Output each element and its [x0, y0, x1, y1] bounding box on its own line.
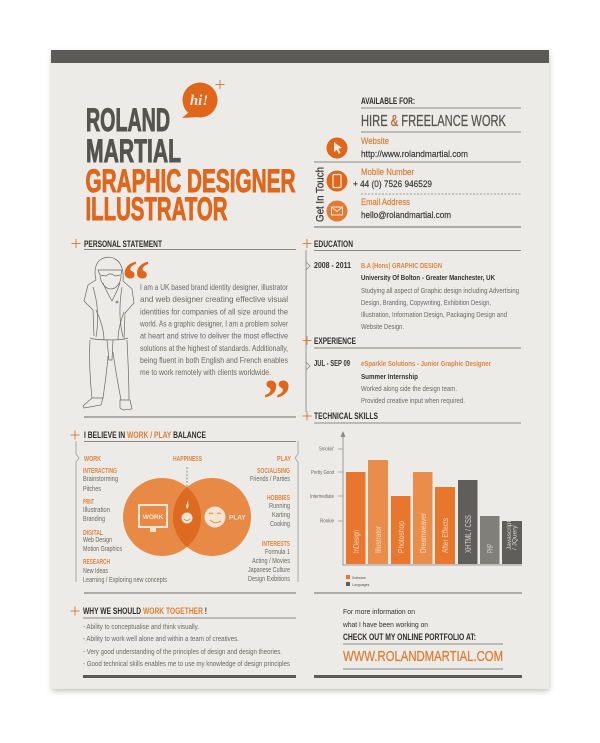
play list: PLAY	[277, 456, 291, 463]
work list	[83, 456, 167, 584]
heading: I BELIEVE IN WORK / PLAY BALANCE	[84, 430, 206, 440]
play list: Karting	[272, 510, 290, 519]
bar chart: Pretty Good	[311, 470, 334, 476]
panel: portfolio call to action: what I have been working on	[342, 620, 428, 629]
panel: availability	[361, 96, 521, 132]
icon: hi speech bubble	[182, 80, 224, 118]
title block	[86, 102, 296, 227]
play list: Formula 1	[265, 547, 290, 556]
bar chart: / JQuery	[512, 525, 518, 550]
statement text: I am a UK based brand identity designer, illustrator	[140, 282, 288, 292]
statement text: and web designer creating effective visual	[140, 294, 288, 304]
play list: INTERESTS	[262, 541, 290, 548]
icon: happy face small	[182, 500, 192, 524]
education entry: Illustration, Information Design, Packaging Design and	[361, 310, 507, 319]
panel: get in touch: http://www.rolandmartial.com	[361, 149, 468, 159]
education entry: Design, Branding, Copywriting, Exhibition Design,	[361, 298, 491, 307]
experience entry	[314, 359, 491, 405]
statement text	[139, 282, 288, 377]
bar chart: InDesign	[352, 530, 361, 553]
panel: get in touch: Mobile Number	[361, 167, 414, 177]
name heading: MARTIAL	[86, 133, 181, 169]
name heading: ROLAND	[86, 102, 170, 138]
chart legend: Software	[352, 576, 366, 580]
play list: Friends / Parties	[250, 474, 290, 483]
closing quotes: ”	[263, 369, 291, 431]
education heading	[302, 239, 521, 250]
bar chart: Illustrator	[374, 526, 383, 553]
name heading	[86, 102, 181, 169]
statement text: solutions at the highest of standards. Additionally,	[140, 343, 288, 353]
chart legend: Languages	[352, 583, 370, 587]
play list: Design Exibitions	[248, 574, 290, 583]
work list: Web Design	[83, 535, 112, 544]
play list: Acting / Movies	[252, 556, 290, 565]
happiness label: HAPPINESS	[173, 456, 202, 463]
bar chart: Smokin'	[319, 446, 334, 452]
experience entry: Summer Internship	[361, 372, 418, 381]
panel: personal statement	[72, 239, 296, 431]
work list: RESEARCH	[83, 559, 110, 566]
panel: work play balance	[70, 430, 298, 593]
icon: monitor: WORK	[143, 514, 164, 521]
work list: Brainstorming	[83, 474, 118, 483]
bullet list: - Good technical skills enables me to use my knowledge of design principles	[83, 659, 290, 668]
bar chart: Rookie	[320, 518, 334, 524]
bar chart: XHTML / CSS	[464, 515, 473, 553]
bar chart	[310, 431, 522, 565]
work list: Learning / Exploring new concepts	[83, 575, 167, 584]
bullet list: - Ability to work well alone and within a team of creatives.	[83, 634, 239, 643]
statement text: being fluent in both English and French enables	[140, 355, 288, 365]
icon: play face: PLAY	[229, 514, 246, 522]
bar chart: Photoshop	[397, 521, 406, 553]
job title heading: GRAPHIC DESIGNER	[86, 163, 296, 199]
panel: portfolio call to action: CHECK OUT MY ONLINE PORTFOLIO AT:	[343, 632, 476, 642]
panel: portfolio call to action: WWW.ROLANDMARTIAL.COM	[343, 648, 503, 665]
illustration: man in hoodie	[83, 257, 134, 410]
paper sheet	[51, 50, 549, 689]
statement text: me to work remotely with clients worldwide.	[140, 367, 271, 377]
icon: website cursor	[326, 138, 348, 158]
education entry: Studying all aspect of Graphic design including Advertising	[361, 286, 519, 295]
bar chart: Javascript	[506, 521, 513, 550]
opening quotes: “	[122, 250, 150, 312]
top bar	[51, 50, 549, 63]
icon: mobile phone	[326, 170, 348, 192]
heading: PERSONAL STATEMENT	[84, 239, 162, 249]
education entry: Website Design.	[361, 322, 404, 331]
heading: TECHNICAL SKILLS	[314, 411, 378, 421]
bar chart: PHP	[486, 544, 495, 553]
work list: PRINT	[83, 499, 94, 506]
panel: get in touch: hello@rolandmartial.com	[361, 210, 451, 220]
education heading: EDUCATION	[314, 239, 353, 249]
icon: hi speech bubble: hi!	[190, 93, 208, 109]
play list: SOCIALISING	[257, 468, 290, 475]
bullet list	[83, 622, 290, 668]
work list: WORK	[84, 456, 101, 463]
panel: get in touch: Email Address	[361, 197, 410, 207]
bar chart: Intermediate	[310, 494, 334, 500]
experience heading: EXPERIENCE	[314, 336, 356, 346]
chart legend	[346, 575, 370, 587]
panel: get in touch: Website	[361, 136, 389, 146]
play list	[248, 456, 291, 583]
play list: HOBBIES	[267, 495, 290, 502]
work list: Branding	[83, 514, 105, 523]
experience entry: JUL - SEP 09	[314, 359, 350, 368]
panel: availability: AVAILABLE FOR:	[361, 96, 415, 106]
bar chart: Dreamweaver	[419, 513, 428, 553]
play list: Cooking	[270, 519, 290, 528]
statement text: world. As a graphic designer, I am a problem solver	[139, 318, 288, 328]
panel: portfolio call to action	[314, 607, 522, 678]
education entry: B.A (Hons) GRAPHIC DESIGN	[361, 263, 442, 270]
icon: email envelope	[326, 200, 348, 222]
education entry: University Of Bolton - Greater Manchester, UK	[361, 273, 495, 282]
heading: WHY WE SHOULD WORK TOGETHER !	[83, 606, 207, 616]
education entry	[314, 261, 519, 331]
work list: New Ideas	[83, 566, 108, 575]
job title heading: ILLUSTRATOR	[86, 191, 228, 227]
heading	[72, 239, 296, 250]
experience entry: Provided creative input when required.	[361, 396, 465, 405]
work list: Pitches	[83, 484, 101, 493]
education entry: 2008 - 2011	[314, 261, 351, 270]
work list: Motion Graphics	[83, 544, 122, 553]
panel: technical skills	[302, 411, 522, 593]
play list: Running	[269, 501, 290, 510]
bullet list: - Very good understanding of the principles of design and design theories.	[83, 647, 282, 656]
heading	[70, 430, 296, 442]
heading	[70, 606, 296, 618]
bullet list: - Ability to conceptualise and think visually.	[83, 622, 199, 631]
experience entry: Worked along side the design team.	[361, 384, 457, 393]
panel: education and experience	[302, 239, 521, 412]
experience entry: eSparkle Solutions - Junior Graphic Designer	[361, 361, 491, 368]
work list: DIGITAL	[83, 530, 104, 537]
vertical label: Get In Touch	[314, 167, 326, 222]
panel: get in touch	[314, 136, 521, 227]
panel: get in touch: + 44 (0) 7526 946529	[353, 179, 432, 189]
statement text: identities for companies of all size around the	[140, 306, 288, 316]
work list: INTERACTING	[83, 468, 117, 475]
statement text: at heart and strive to deliver the most effective	[140, 330, 288, 340]
work list: Illustration	[83, 505, 110, 514]
panel: why work together	[70, 606, 296, 678]
job title heading	[86, 163, 296, 227]
experience heading	[302, 336, 521, 348]
venn diagram	[123, 467, 251, 556]
panel: portfolio call to action: For more information on	[343, 607, 415, 616]
panel: availability: HIRE & FREELANCE WORK	[361, 113, 506, 130]
heading	[302, 411, 521, 423]
bar chart: After Effects	[441, 518, 450, 553]
play list: Japanese Culture	[248, 565, 290, 574]
